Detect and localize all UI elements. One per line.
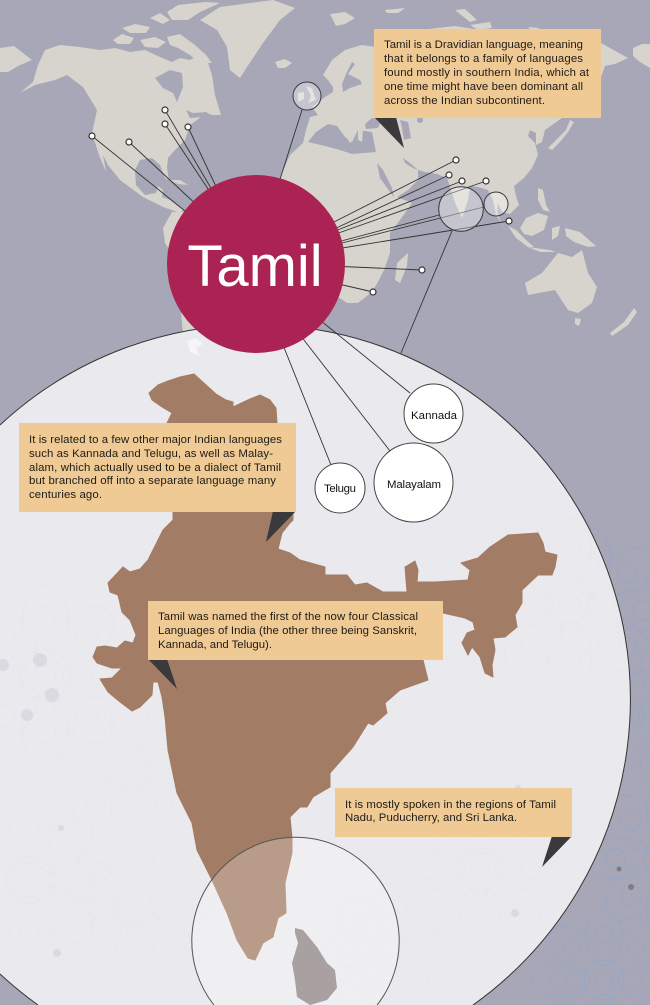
dark pattern spots	[616, 866, 634, 890]
Cuba	[170, 180, 188, 185]
callout: related languages: alam, which actually used to be a dialect of Tamil	[29, 462, 281, 474]
North America	[7, 45, 221, 213]
large magnifier circle	[0, 325, 630, 1005]
UK	[298, 86, 316, 103]
callout: regions spoken: It is mostly spoken in the regions of Tamil	[345, 799, 556, 811]
highlight circle: India	[439, 187, 483, 231]
Tamil circle title	[167, 175, 345, 353]
world map	[0, 0, 650, 345]
Australia	[525, 250, 597, 326]
water overlays	[155, 62, 423, 197]
Greenland	[200, 0, 295, 78]
Tamil circle title: Tamil	[187, 234, 323, 299]
callout: related languages: such as Kannada and Telugu, as well as Malay-	[29, 448, 273, 460]
highlight circle: Malaysia	[484, 192, 508, 216]
callout: classical languages	[148, 601, 443, 689]
callout: related languages: centuries ago.	[29, 489, 102, 501]
Siberia tip west	[0, 46, 32, 72]
language bubble: Kannada	[404, 384, 463, 443]
Northern islands	[330, 8, 540, 31]
location dots	[89, 107, 512, 295]
callout: classical languages: Tamil was named the first of the now four Classical	[158, 611, 418, 623]
language bubble: Kannada: Kannada	[411, 410, 458, 422]
language bubble: Telugu: Telugu	[324, 483, 356, 495]
Madagascar	[395, 253, 408, 283]
callout: Dravidian language: found mostly in southern India, which at	[384, 67, 590, 79]
connector lines	[92, 110, 509, 465]
white blur near top of circle	[187, 338, 203, 356]
Japan and Sakhalin	[548, 120, 574, 150]
callout: classical languages: Kannada, and Telugu).	[158, 639, 272, 651]
highlight circle: UK	[293, 82, 321, 110]
callout: regions spoken	[335, 788, 572, 867]
New Zealand	[610, 308, 637, 336]
callout: Dravidian language: across the Indian subcontinent.	[384, 95, 545, 107]
language bubble: Malayalam: Malayalam	[387, 479, 441, 491]
callout: related languages	[19, 423, 296, 542]
callout: Dravidian language	[374, 29, 601, 148]
callout: related languages: but branched off into a separate language many	[29, 475, 276, 487]
callout: related languages: It is related to a few other major Indian languages	[29, 434, 282, 446]
Sri Lanka	[292, 928, 337, 1005]
callout: classical languages: Languages of India (the other three being Sanskrit,	[158, 625, 417, 637]
Arctic islands	[113, 2, 220, 63]
Southeast Asia islands	[508, 188, 596, 252]
map of India	[93, 374, 557, 960]
Chukotka	[633, 44, 650, 68]
language bubble: Malayalam	[374, 443, 453, 522]
callout: regions spoken: Nadu, Puducherry, and Sri Lanka.	[345, 812, 517, 824]
Italy and Greece	[338, 124, 363, 143]
Eurasia and Africa	[276, 26, 628, 303]
callout: Dravidian language: that it belongs to a family of languages	[384, 53, 583, 65]
language bubble: Telugu	[315, 463, 365, 513]
Iceland	[275, 59, 292, 68]
callout: Dravidian language: Tamil is a Dravidian language, meaning	[384, 39, 583, 51]
inset circle: southern India	[192, 837, 399, 1005]
callout: Dravidian language: one time might have been dominant all	[384, 81, 583, 93]
South America	[163, 212, 215, 345]
